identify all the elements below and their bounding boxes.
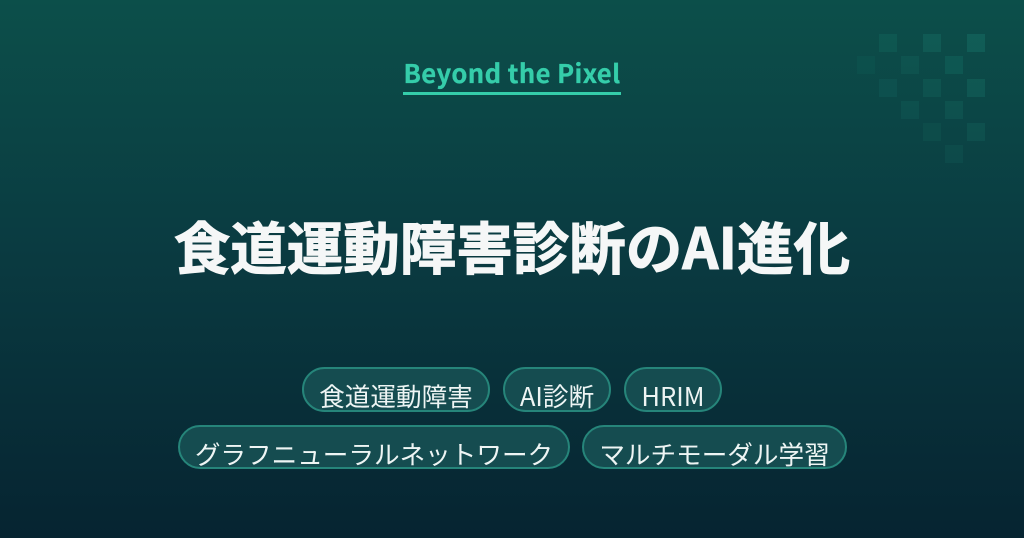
tag: 食道運動障害: 食道運動障害 bbox=[319, 377, 473, 414]
tag: 食道運動障害 bbox=[302, 367, 490, 412]
tag: AI診断 bbox=[503, 367, 611, 412]
decorative checker pattern bbox=[879, 34, 985, 141]
tag: HRIM bbox=[624, 367, 722, 412]
tag: グラフニューラルネットワーク: グラフニューラルネットワーク bbox=[195, 435, 553, 472]
tag: AI診断: AI診断 bbox=[520, 377, 594, 414]
tag: マルチモーダル学習: マルチモーダル学習 bbox=[599, 435, 830, 472]
tag: マルチモーダル学習 bbox=[582, 425, 847, 469]
tag: HRIM: HRIM bbox=[641, 377, 705, 414]
title: 食道運動障害診断のAI進化 bbox=[174, 204, 850, 286]
brand label: Beyond the Pixel bbox=[403, 54, 621, 91]
tag: グラフニューラルネットワーク bbox=[178, 425, 570, 469]
